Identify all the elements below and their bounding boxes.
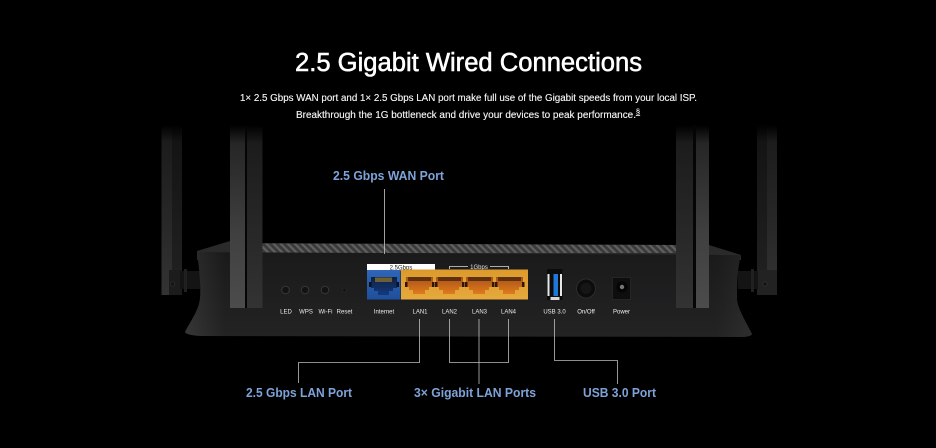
rear labels: LAN4 [501,310,517,316]
rear labels: Internet [374,310,394,316]
router top grille [197,241,741,260]
callout: 3x Gigabit LAN Ports: 3× Gigabit LAN Ports [414,385,536,400]
rear labels: LAN3 [472,310,488,316]
rear labels: LAN1 [412,310,428,316]
2.5Gbps label: 2.5Gbps [390,266,412,272]
on/off button [576,279,596,298]
LAN4 port [495,277,524,294]
LAN ports orange block [401,270,528,300]
rear labels: WPS [299,310,313,316]
left inner antenna [230,125,262,308]
router body [185,252,752,337]
description text: Breakthrough the 1G bottleneck and drive your devices to peak performance. [296,110,636,121]
callout: 3x Gigabit LAN Ports [414,319,536,400]
2.5Gbps label [367,264,435,272]
rear labels: Wi-Fi [318,310,332,316]
description text: § [636,107,640,116]
rear labels: LAN2 [442,310,458,316]
rear labels: Reset [337,310,353,316]
rear labels: USB 3.0 [543,310,566,316]
callout: 2.5 Gbps WAN Port [333,168,445,254]
WAN port blue [367,270,400,300]
router [162,125,777,337]
description text [240,93,697,121]
rear labels [280,310,630,316]
right outer antenna [738,125,777,295]
rear labels: LED [280,310,293,316]
right inner antenna [676,125,709,308]
rear labels: Power [613,310,630,316]
LAN3 port [465,277,494,294]
rear labels: On/Off [577,310,595,316]
LAN2 port [435,277,464,294]
LED, WPS, Wi-Fi buttons and reset [282,286,346,294]
callout: USB 3.0 Port [554,319,657,400]
left outer antenna [162,125,200,295]
LAN1 port [405,277,434,294]
power socket [612,278,630,300]
callout: 2.5 Gbps LAN Port: 2.5 Gbps LAN Port [246,385,353,400]
callout: 2.5 Gbps LAN Port [246,319,420,400]
callout: 2.5 Gbps WAN Port: 2.5 Gbps WAN Port [333,168,445,183]
1Gbps bracket [450,265,508,271]
description text: 1× 2.5 Gbps WAN port and 1× 2.5 Gbps LAN port make full use of the Gigabit speeds from your local ISP. [240,93,697,104]
title: 2.5 Gigabit Wired Connections [295,49,642,77]
1Gbps bracket: 1Gbps [470,265,488,271]
callout: USB 3.0 Port: USB 3.0 Port [583,385,657,400]
USB 3.0 port [547,269,562,300]
